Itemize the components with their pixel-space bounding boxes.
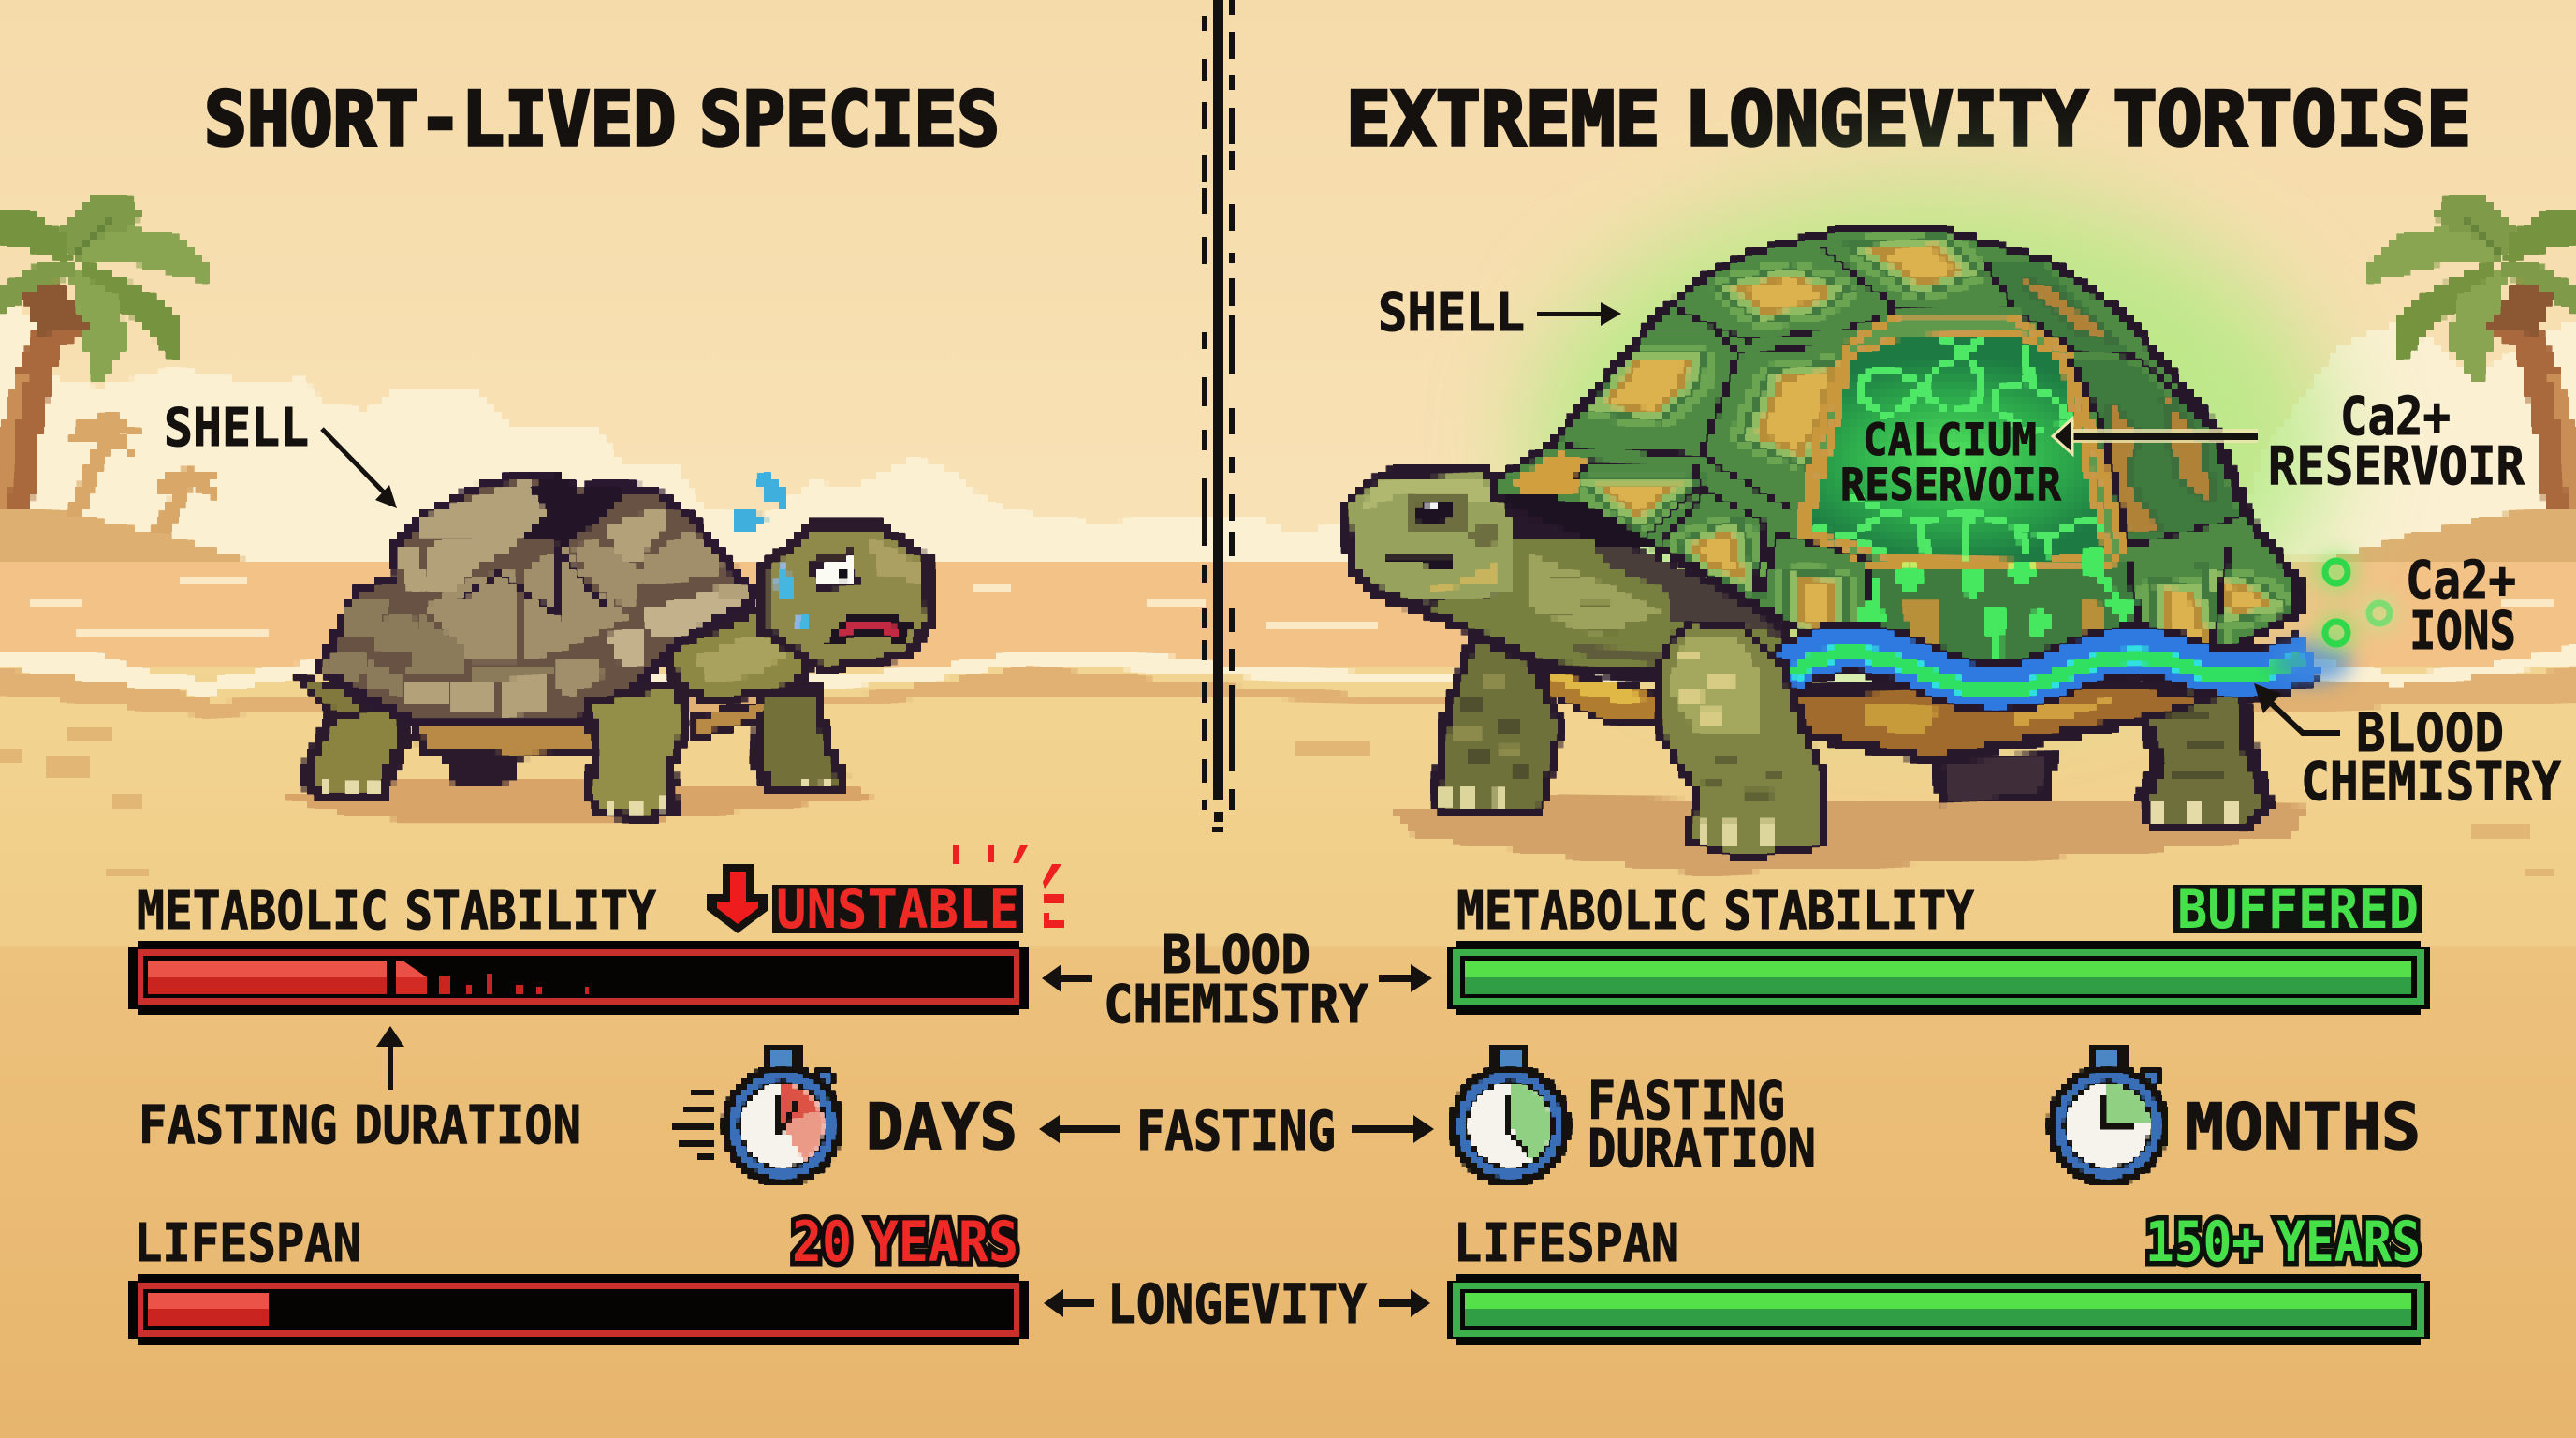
warning sparks: [953, 845, 1064, 928]
centre label: blood chemistry with arrows: BLOOD: [1162, 925, 1310, 986]
icon: red down arrow: [707, 864, 768, 933]
label: Ca2+ reservoir: RESERVOIR: [2268, 436, 2525, 497]
illustration: stressed short-lived turtle with cracked shell: [285, 472, 936, 823]
arrow into calcium reservoir: [2053, 418, 2258, 454]
bar: metabolic stability, tortoise: [1447, 941, 2430, 1015]
sky background: [0, 0, 2576, 566]
right island: [2321, 510, 2576, 563]
centre label: blood chemistry with arrows: CHEMISTRY: [1104, 975, 1368, 1035]
calcium reservoir label on shell: [1840, 415, 2062, 511]
metabolic stability heading (right): METABOLIC STABILITY: [1456, 881, 1974, 942]
metabolic stability heading (left): METABOLIC STABILITY: [137, 881, 656, 942]
buffered badge: BUFFERED: [2177, 879, 2419, 941]
calcium reservoir label on shell: CALCIUM: [1863, 415, 2037, 466]
sand ground: [0, 655, 2576, 1438]
lifespan heading (left): LIFESPAN: [134, 1213, 361, 1274]
lifespan heading (right): LIFESPAN: [1454, 1213, 1679, 1274]
shell: [1486, 225, 2310, 674]
calcium ion glow: [2316, 551, 2398, 653]
label: days: DAYS: [866, 1091, 1017, 1165]
speed lines: [672, 1090, 714, 1160]
beach scenery: clouds, sea and waves: [0, 304, 2576, 877]
icon: calcium ions: [2325, 561, 2390, 644]
title: short-lived species: SHORT-LIVED SPECIES: [204, 76, 1000, 163]
bar: lifespan, tortoise: [1447, 1274, 2430, 1345]
label: blood chemistry with arrow: [2254, 683, 2561, 813]
title: extreme longevity tortoise: EXTREME LONGEVITY TORTOISE: [1346, 76, 2471, 163]
label: blood chemistry with arrow: BLOOD: [2356, 703, 2504, 764]
right palm tree: [2373, 198, 2576, 510]
unstable badge: UNSTABLE: [776, 879, 1019, 941]
centre label: longevity with arrows: LONGEVITY: [1107, 1272, 1367, 1336]
arrow up to bar: [376, 1026, 404, 1090]
shell label with arrow (right): [1378, 283, 1621, 344]
centre label: fasting with arrows: [1039, 1099, 1434, 1163]
shell label with arrow (right): SHELL: [1378, 283, 1525, 344]
left palm tree: [0, 198, 203, 510]
head and neck coordinates: [1342, 466, 1802, 816]
label: fasting duration (right): FASTING: [1588, 1071, 1785, 1132]
blood chemistry outer glow: [2273, 642, 2351, 683]
bar: lifespan, short-lived: [128, 1274, 1029, 1345]
label: Ca2+ ions: Ca2+: [2406, 550, 2516, 611]
illustration: long-lived tortoise with calcium reservoir: [1342, 225, 2312, 874]
icon: stopwatch, months: [2047, 1047, 2169, 1186]
label: fasting duration (right): [1588, 1071, 1816, 1180]
value: 20 years: 20 YEARS: [792, 1210, 1018, 1275]
centre label: blood chemistry with arrows: [1042, 925, 1432, 1035]
old-crop coordinates: shadow, rear limbs, plastron: [1390, 678, 2307, 874]
shell label with arrow (left): SHELL: [164, 398, 309, 459]
centre divider: [1202, 0, 1235, 832]
shell label with arrow (left): [164, 398, 397, 508]
label: Ca2+ ions: [2406, 550, 2516, 662]
green glow around tortoise shell: [1526, 187, 2331, 693]
centre label: fasting with arrows: FASTING: [1136, 1099, 1336, 1163]
value: 150+ years: 150+ YEARS: [2145, 1210, 2421, 1275]
icon: stopwatch, fasting duration: [1449, 1047, 1571, 1186]
bar: metabolic stability, short-lived: [128, 941, 1029, 1015]
label: Ca2+ reservoir: [2268, 387, 2525, 497]
label: fasting duration (right): DURATION: [1588, 1119, 1816, 1180]
blood vessel: [1778, 649, 2307, 687]
icon: stopwatch, days: [722, 1047, 843, 1186]
label: fasting duration (left): FASTING DURATION: [139, 1095, 581, 1156]
label: Ca2+ ions: IONS: [2409, 601, 2516, 662]
calcium reservoir label on shell: RESERVOIR: [1840, 460, 2062, 511]
label: months: MONTHS: [2185, 1091, 2421, 1165]
front leg: [1542, 618, 1830, 863]
left island with distant palms: [0, 412, 256, 563]
label: Ca2+ reservoir: Ca2+: [2340, 387, 2451, 448]
